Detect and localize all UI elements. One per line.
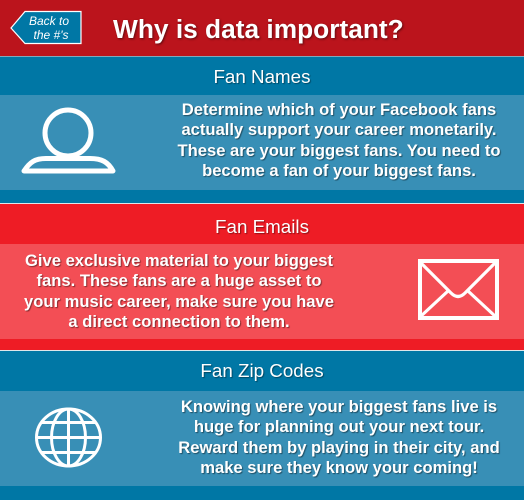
title: Why is data important? [113,14,404,44]
text: fan zip codes: Knowing where your biggest fans live is [181,397,497,416]
text: fan emails [24,251,335,331]
heading: fan names: Fan Names [213,66,311,87]
icon: globe [35,408,102,468]
text: fan zip codes: huge for planning out your next tour. [194,417,484,436]
text: fan zip codes [178,397,500,478]
back button: Back to [29,14,69,28]
text: fan names: actually support your career monetarily. [181,120,497,139]
panel: fan names [0,57,524,203]
panel body: fan emails [0,244,524,339]
header bar [0,0,524,57]
text: fan emails: Give exclusive material to your biggest [25,251,333,270]
text: fan names: become a fan of your biggest fans. [202,161,476,180]
icon: envelope [418,259,499,320]
panel: fan zip codes [0,350,524,500]
text: fan emails: fans. These fans are a huge asset to [37,271,321,290]
back button [10,10,82,44]
text: fan names: These are your biggest fans. You need to [177,141,501,160]
text: fan zip codes: make sure they know your coming! [200,458,478,477]
text: fan emails: a direct connection to them. [68,312,290,331]
panel body: fan zip codes [0,391,524,486]
text: fan emails: your music career, make sure you have [24,292,334,311]
back button: the #'s [34,28,68,42]
panel: fan emails [0,203,524,350]
text: fan zip codes: Reward them by playing in their city, and [178,438,500,457]
text: fan names [177,100,502,181]
heading: fan emails: Fan Emails [215,216,309,237]
heading: fan zip codes: Fan Zip Codes [200,360,324,381]
text: fan names: Determine which of your Facebook fans [182,100,496,119]
panel body: fan names [0,95,524,190]
icon: person [22,108,116,174]
